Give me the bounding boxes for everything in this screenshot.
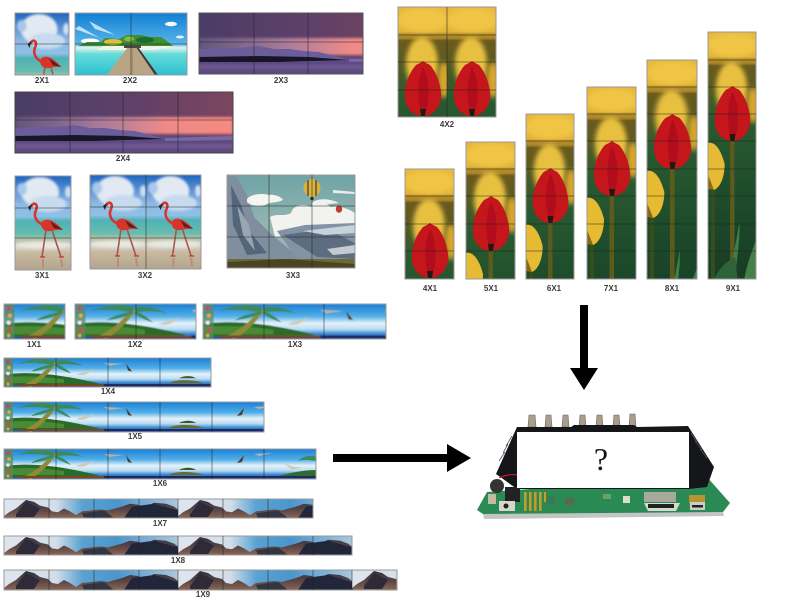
video connectors (528, 414, 636, 427)
panel: 1X9 wall (4, 570, 526, 599)
panel: 7X1 wall (586, 87, 639, 334)
label: 4X2: 4X2 (440, 120, 455, 129)
battery and wire (490, 475, 518, 493)
panel: 6X1 wall (525, 114, 577, 361)
HDMI port (644, 492, 680, 511)
label: 7X1: 7X1 (604, 284, 619, 293)
label: 1X2: 1X2 (128, 340, 143, 349)
label: 1X8: 1X8 (171, 556, 186, 565)
label: 1X4: 1X4 (101, 387, 116, 396)
white question box (517, 432, 689, 488)
power jack (488, 487, 520, 511)
panel: 2X2 wall (75, 13, 187, 85)
panel: 1X8 wall (4, 536, 526, 565)
panel: 4X1 wall (404, 169, 457, 416)
label: 2X3: 2X3 (274, 76, 289, 85)
label: 6X1: 6X1 (547, 284, 562, 293)
label: 3X1: 3X1 (35, 271, 50, 280)
panel: 1X4 wall (4, 358, 316, 396)
label: 1X3: 1X3 (288, 340, 303, 349)
label: 8X1: 8X1 (665, 284, 680, 293)
label: 1X5: 1X5 (128, 432, 143, 441)
label: 4X1: 4X1 (423, 284, 438, 293)
panel: 1X6 wall (4, 449, 316, 488)
panel: 5X1 wall (465, 142, 518, 389)
label: 1X6: 1X6 (153, 479, 168, 488)
panel: 1X2 wall (75, 304, 438, 349)
panel: 3X3 wall (227, 175, 355, 280)
label: 1X9: 1X9 (196, 590, 211, 599)
panel: 3X2 wall (90, 175, 201, 280)
label: 1X1: 1X1 (27, 340, 42, 349)
panel: 9X1 wall (707, 32, 759, 293)
label: 9X1: 9X1 (726, 284, 741, 293)
label: 1X7: 1X7 (153, 519, 168, 528)
label: 2X4: 2X4 (116, 154, 131, 163)
panel: 2X4 wall (15, 92, 233, 163)
label: 2X1: 2X1 (35, 76, 50, 85)
panel: 8X1 wall (646, 60, 700, 307)
panel: 3X1 wall (15, 176, 71, 280)
label: 3X3: 3X3 (286, 271, 301, 280)
panel: 1X3 wall (203, 304, 569, 349)
arrow: down to controller board (570, 305, 598, 390)
pin headers (524, 492, 546, 511)
circuit board (477, 477, 730, 514)
panel: 2X3 wall (199, 13, 417, 85)
panel: 1X1 wall (4, 304, 370, 349)
panel: 2X1 wall (15, 13, 69, 107)
board shadow (483, 511, 724, 519)
mini USB port (689, 495, 705, 510)
label: 2X2: 2X2 (123, 76, 138, 85)
arrow: right to controller board (333, 444, 471, 472)
panel: 4X2 wall (397, 7, 499, 254)
heatsink (496, 425, 714, 489)
board components (547, 494, 630, 505)
label: 3X2: 3X2 (138, 271, 153, 280)
panel: 1X5 wall (4, 402, 316, 441)
question mark: ? (594, 441, 608, 477)
icon: controller board (477, 414, 730, 519)
label: 5X1: 5X1 (484, 284, 499, 293)
panel: 1X7 wall (4, 499, 526, 528)
